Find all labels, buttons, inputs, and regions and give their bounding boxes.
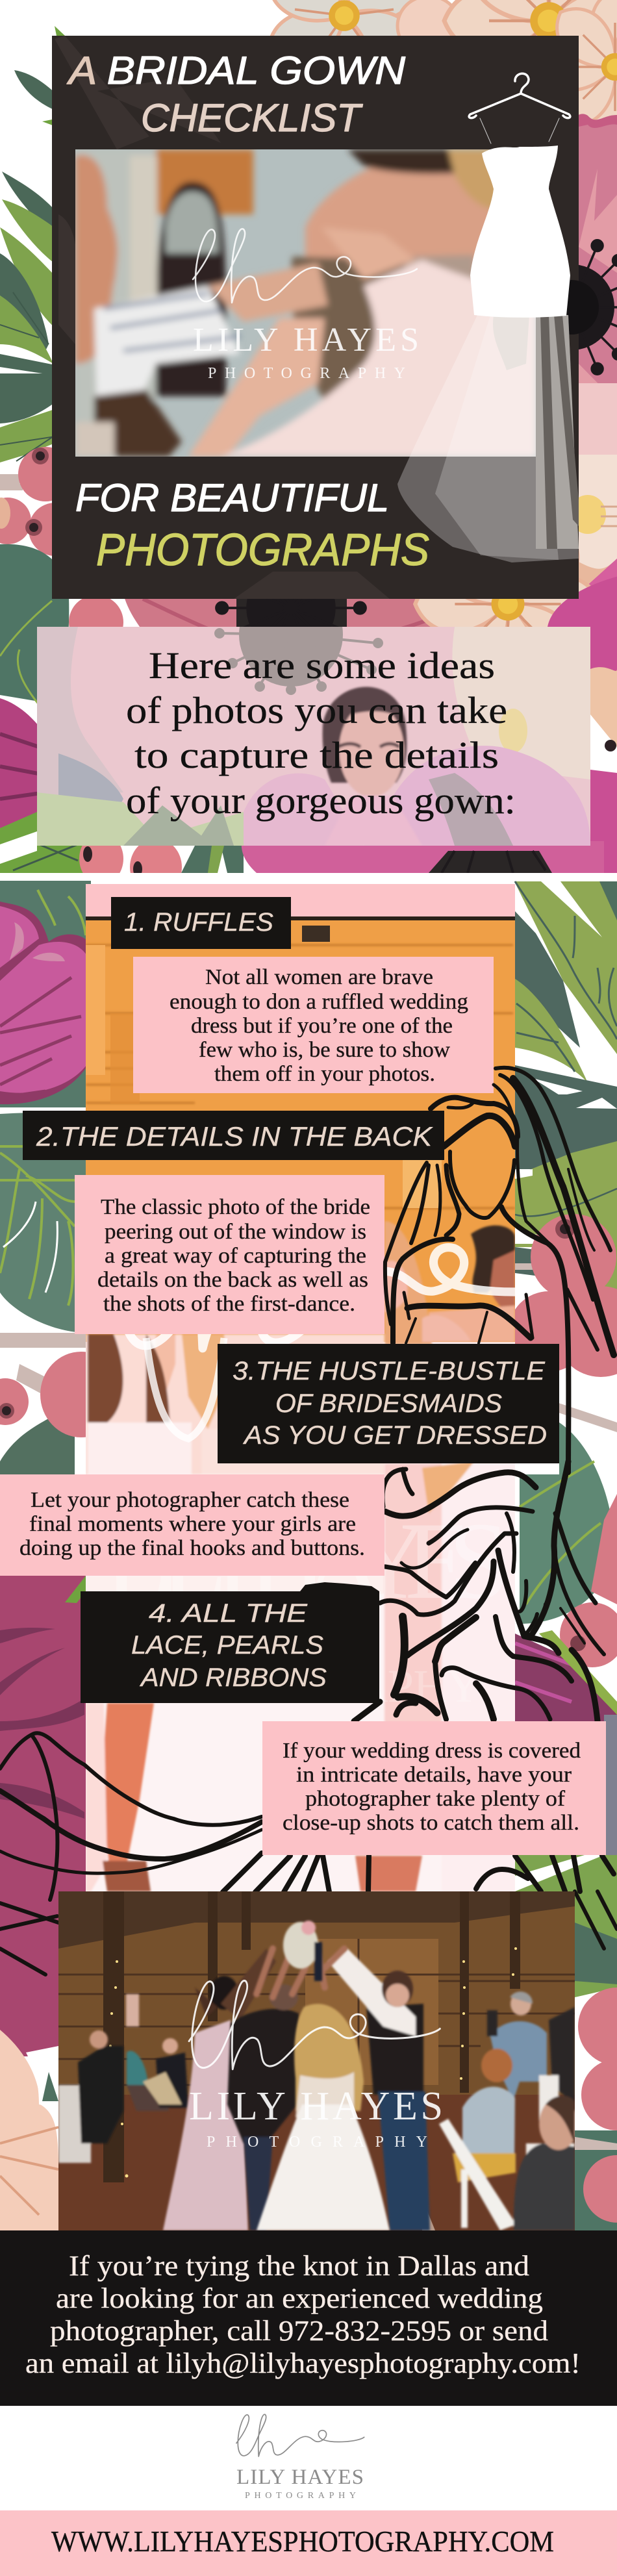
logo watermark: PHOTOGRAPHY (208, 365, 405, 382)
grey stamen (214, 627, 383, 695)
peach flower lower right (413, 549, 591, 627)
left magenta flower (0, 698, 37, 828)
top floral background (0, 0, 617, 896)
text box 4: If your wedding dress is covered (283, 1739, 581, 1763)
footer logo: LILY HAYES (236, 2466, 364, 2489)
middle floral background (0, 881, 617, 2230)
black contact band (0, 2230, 617, 2406)
heading 2: 2.THE DETAILS IN THE BACK (36, 1121, 433, 1152)
intro text: of photos you can take (126, 689, 507, 731)
sweeping skirt lines (0, 1733, 262, 1825)
text box 3: Let your photographer catch these (31, 1488, 349, 1512)
text box 2: the shots of the first-dance. (103, 1292, 355, 1316)
stamen ghost in panel (544, 280, 599, 335)
black contact band: are looking for an experienced wedding (56, 2282, 543, 2314)
floor (58, 2095, 575, 2230)
upper right magenta flower (548, 577, 617, 671)
lower right leaves and berries (575, 1891, 617, 2230)
left berries (0, 1352, 86, 1474)
left foliage (0, 26, 65, 490)
title text: PHOTOGRAPHS (96, 524, 429, 575)
heading 3 (218, 1344, 559, 1463)
lilac petal (244, 773, 343, 846)
heading 3: AS YOU GET DRESSED (243, 1421, 547, 1450)
upper skirt folds (507, 1513, 514, 1572)
heading 3: 3.THE HUSTLE-BUSTLE (233, 1357, 546, 1385)
strokes below box 4 (223, 1853, 329, 1892)
pink flower below header (69, 599, 431, 627)
bridesmaid (163, 1949, 276, 2230)
bridesmaids lower photo (86, 1334, 384, 1474)
lower left peach flower (0, 2030, 58, 2230)
text box 1: Not all women are brave (205, 965, 433, 989)
intro text: to capture the details (134, 734, 499, 776)
text box 1: few who is, be sure to show (199, 1038, 450, 1062)
flowers along the top edge (270, 0, 617, 120)
right berries (509, 1214, 617, 1432)
heading 3: OF BRIDESMAIDS (275, 1389, 502, 1418)
text box 3: final moments where your girls are (29, 1512, 356, 1536)
text box 1: them off in your photos. (214, 1062, 435, 1086)
intro text (126, 644, 516, 822)
text box 2: a great way of capturing the (105, 1244, 366, 1268)
left pale strip (37, 627, 123, 796)
text box 4: close-up shots to catch them all. (283, 1811, 579, 1835)
dark panel (52, 36, 579, 599)
left teal leaf second (0, 1107, 91, 1333)
heading 4: 4. ALL THE (149, 1599, 308, 1628)
intro panel artwork (37, 627, 590, 846)
pale green base (37, 792, 244, 846)
photo watermark (189, 1980, 443, 2151)
logo watermark: LILY HAYES (193, 322, 419, 359)
left magenta flower (0, 902, 88, 1104)
string lights (109, 1947, 517, 2177)
photo column (86, 884, 610, 1891)
text box 3: doing up the final hooks and buttons. (19, 1536, 365, 1560)
right orange flower edge (590, 667, 617, 747)
photo watermark: LILY HAYES (189, 2084, 443, 2128)
bridesmaids faces photo (384, 1221, 515, 1345)
hair top (431, 1098, 518, 1137)
text box 3 (0, 1474, 384, 1576)
left teal leaf top (0, 881, 91, 1107)
grey left petals (58, 753, 123, 802)
long strands (496, 1068, 611, 1250)
heading 4: LACE, PEARLS (131, 1631, 323, 1660)
column base (86, 884, 515, 1891)
column logo watermark: PHOTOGRAPHY (136, 1660, 481, 1712)
left magenta panel (0, 1576, 86, 2056)
text box 1: enough to don a ruffled wedding (170, 990, 468, 1014)
text box 2: The classic photo of the bride (101, 1195, 370, 1219)
man in black (227, 1984, 299, 2230)
dress (470, 145, 570, 318)
title text: FOR BEAUTIFUL (75, 476, 389, 520)
text box 1 (133, 957, 494, 1093)
lower pale photo (86, 1461, 515, 1891)
intro text: of your gorgeous gown: (126, 779, 516, 822)
shoulders (393, 1239, 453, 1343)
heading 4: AND RIBBONS (140, 1663, 327, 1692)
footer logo (236, 2414, 364, 2501)
ceiling (58, 1891, 575, 1949)
header panel (52, 36, 599, 599)
arms raised (257, 1949, 344, 1997)
posts (103, 1891, 520, 2182)
groom-side man (328, 1949, 430, 2230)
inner strands (385, 1163, 427, 1324)
lower left green (0, 812, 84, 873)
barn reception photo (58, 1891, 578, 2230)
bride (257, 2004, 390, 2230)
dress folds (385, 1472, 536, 1516)
heading 2 (23, 1111, 444, 1160)
pink top strip (86, 884, 515, 916)
title text: A BRIDAL GOWN (67, 49, 406, 92)
woman portrait (321, 685, 409, 845)
black contact band: If you’re tying the knot in Dallas and (69, 2250, 529, 2282)
heading 1: 1. RUFFLES (124, 908, 273, 937)
right pale flower (579, 455, 617, 586)
black contact band: photographer, call 972-832-2595 or send (50, 2315, 548, 2347)
text box 2 (75, 1175, 384, 1334)
wood wall photo (86, 916, 515, 1342)
lower berries (79, 846, 182, 873)
right teal leaf (520, 1422, 614, 1624)
text box 4: in intricate details, have your (296, 1763, 572, 1787)
heading 1 (111, 897, 291, 949)
right guests (439, 1991, 578, 2230)
photo watermark: PHOTOGRAPHY (207, 2134, 427, 2151)
left berries (0, 447, 52, 556)
dress lace (493, 315, 529, 370)
hanger (469, 73, 570, 144)
column logo watermark (104, 1186, 610, 1712)
title text (67, 49, 429, 575)
footer website strip: WWW.LILYHAYESPHOTOGRAPHY.COM (51, 2525, 554, 2558)
left guests (58, 1994, 188, 2163)
right berries lower (560, 1494, 617, 1667)
heading 4 (81, 1582, 379, 1703)
footer logo: PHOTOGRAPHY (245, 2491, 356, 2501)
magenta flower at bottom (242, 841, 604, 873)
wooden doors (305, 1939, 438, 2085)
text box 4 (262, 1721, 606, 1855)
bust (407, 1306, 531, 1338)
line-art bride (0, 1068, 617, 1975)
face (450, 1152, 514, 1218)
veil (397, 315, 579, 562)
title text: CHECKLIST (141, 96, 363, 140)
white divider between sections (0, 873, 617, 881)
header photo (75, 149, 536, 457)
text box 2: peering out of the window is (105, 1220, 366, 1244)
faint leaves in panel (55, 36, 390, 599)
left teal leaf (0, 544, 69, 705)
stems and leaves at bottom (181, 846, 244, 873)
right dark magenta flower (515, 1630, 617, 1997)
right green leaves (514, 881, 617, 1276)
intro text: Here are some ideas (149, 644, 495, 687)
logo watermark (193, 229, 419, 382)
text box 2: details on the back as well as (97, 1268, 368, 1292)
beige right flower (452, 627, 590, 779)
bouquet (283, 1921, 322, 1981)
column logo watermark: LILY HAYES (104, 1500, 510, 1622)
right pink flower (579, 114, 617, 455)
text box 4: photographer take plenty of (305, 1787, 566, 1811)
taupe stem (0, 1333, 86, 1348)
footer website strip (0, 2510, 617, 2576)
text box 1: dress but if you’re one of the (191, 1014, 453, 1038)
black contact band: an email at lilyh@lilyhayesphotography.com! (25, 2347, 581, 2379)
